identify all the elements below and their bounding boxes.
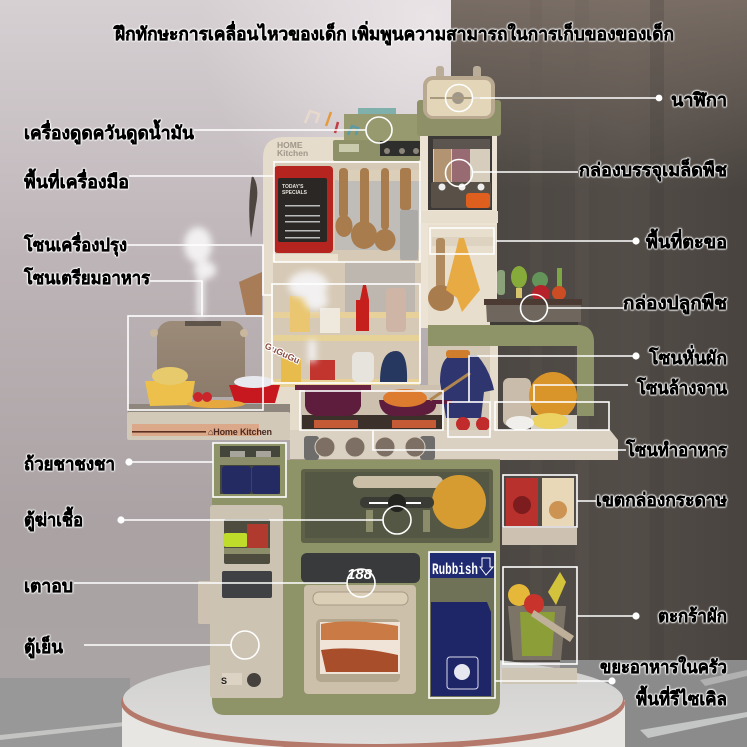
left counter: ⌂Home Kitchen: [208, 427, 272, 437]
main cabinet frame: [263, 137, 420, 440]
labels left: พื้นที่เครื่องมือ: [24, 168, 129, 192]
labels left: เครื่องดูดควันดูดน้ำมัน: [24, 119, 195, 145]
rubbish bin: Rubbish: [432, 561, 478, 579]
labels left: ตู้เย็น: [24, 635, 64, 659]
labels right: เขตกล่องกระดาษ: [596, 490, 727, 510]
pots: [295, 373, 470, 430]
red menu board: TODAY'S: [282, 184, 304, 190]
callout dots: [117, 95, 662, 685]
hook panel and towel: [428, 225, 496, 325]
plant box: [484, 266, 582, 327]
tea cabinet: [213, 443, 286, 497]
music notes: [305, 111, 358, 135]
oven: [301, 553, 420, 694]
labels right: นาฬิกา: [671, 90, 727, 110]
red menu board: SPECIALS: [282, 190, 308, 196]
marble table: [121, 654, 625, 747]
callout lines and markers: [74, 84, 662, 698]
main counter: [290, 430, 618, 460]
sterilizer cabinet: [301, 469, 493, 543]
labels right: กล่องบรรจุเมล็ดพืช: [579, 158, 727, 182]
sound text: GuGuGu: [263, 341, 301, 366]
hanging utensils: [272, 168, 421, 262]
vegetable basket: [508, 572, 574, 660]
title: ฝึกทักษะการเคลื่อนไหวของเด็ก เพิ่มพูนความสามารถในการเก็บของของเด็ก: [113, 21, 674, 46]
labels right: พื้นที่ตะขอ: [646, 228, 727, 252]
red menu board: [274, 166, 333, 253]
labels right: โซนทำอาหาร: [625, 439, 727, 460]
brown cup and spatula: [239, 175, 262, 315]
oven: 188: [347, 566, 373, 583]
toaster and food: [145, 321, 280, 408]
kitchen toy: [127, 66, 618, 715]
kettle and sink: [440, 350, 577, 431]
green bridge: [428, 325, 594, 416]
fridge: [198, 505, 283, 698]
labels right: [579, 90, 728, 709]
labels right: ขยะอาหารในครัว: [600, 656, 727, 677]
hood: [333, 108, 420, 161]
labels left: เตาอบ: [24, 576, 73, 596]
labels right: กล่องปลูกพืช: [623, 293, 727, 315]
rubbish bin: [430, 553, 495, 697]
kitchen toy: Kitchen: [277, 148, 308, 158]
seed box: [420, 136, 498, 223]
labels left: ถ้วยชาชงชา: [24, 454, 115, 474]
upper right column: [420, 136, 497, 328]
labels left: โซนเครื่องปรุง: [23, 232, 127, 257]
labels right: โซนล้างจาน: [636, 377, 728, 398]
knobs: [304, 436, 435, 460]
labels right: ตะกร้าผัก: [658, 606, 727, 626]
labels right: โซนหั่นผัก: [648, 345, 727, 368]
labels right: พื้นที่รีไซเคิล: [636, 685, 727, 709]
fridge: S: [221, 676, 227, 686]
kitchen toy: HOME: [277, 140, 303, 150]
left counter: [127, 404, 290, 440]
lower green body: [212, 460, 500, 715]
right shelves: [502, 478, 577, 684]
clock: [417, 66, 501, 136]
labels left: โซนเตรียมอาหาร: [23, 267, 150, 288]
labels left: ตู้ฆ่าเชื้อ: [24, 506, 83, 532]
seasoning shelf items: [273, 285, 420, 387]
labels left: [23, 119, 195, 659]
steam: [184, 227, 328, 362]
